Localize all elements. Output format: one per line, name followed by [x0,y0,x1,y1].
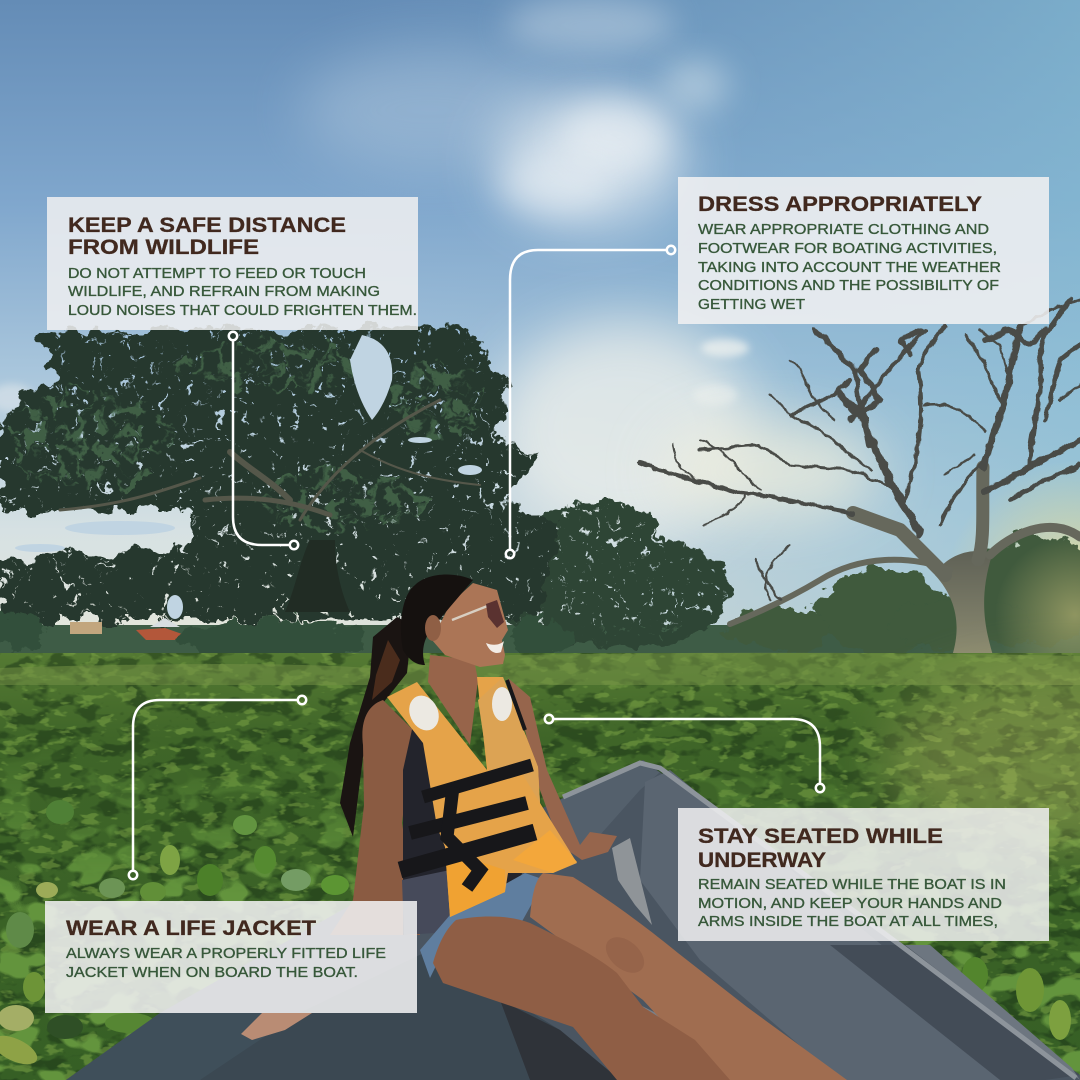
hair [401,575,473,665]
body text: LOUD NOISES THAT COULD FRIGHTEN THEM. [68,302,417,319]
trees: distant right [725,535,1080,652]
woman in life jacket [241,575,847,1080]
foreground leaves [0,800,1071,1070]
heading: DRESS APPROPRIATELY [698,192,982,216]
heading: FROM WILDLIFE [68,235,259,259]
connector: seated note [545,715,824,792]
connector: dress note [506,246,675,558]
panel: stay seated [678,808,1049,941]
vest badges [404,691,444,735]
far ground strip [0,625,1080,675]
connector: life jacket note [129,696,306,879]
panel: wear a life jacket [45,901,417,1013]
body text: REMAIN SEATED WHILE THE BOAT IS IN [698,876,1006,893]
sky gaps in the canopy [15,335,482,619]
vest straps [400,680,535,888]
body text: TAKING INTO ACCOUNT THE WEATHER [698,259,1001,276]
body text: CONDITIONS AND THE POSSIBILITY OF [698,277,999,294]
body text [68,265,417,319]
body text: JACKET WHEN ON BOARD THE BOAT. [66,964,358,981]
heading: STAY SEATED WHILE [698,824,943,848]
heading [68,213,346,259]
shrubs [0,612,572,664]
sunglasses [452,605,490,620]
body text: WEAR APPROPRIATE CLOTHING AND [698,221,989,238]
body text: FOOTWEAR FOR BOATING ACTIVITIES, [698,240,997,257]
body text: DO NOT ATTEMPT TO FEED OR TOUCH [68,265,366,282]
tree: large green canopy on left [0,328,560,620]
panel: keep a safe distance [47,197,418,330]
body text: ARMS INSIDE THE BOAT AT ALL TIMES, [698,913,998,930]
heading: KEEP A SAFE DISTANCE [68,213,346,237]
body text [698,221,1001,313]
trees: mid background [485,500,730,650]
panel: dress appropriately [678,177,1049,324]
connector: distance note [229,332,298,549]
ponytail [340,617,412,837]
body text: WILDLIFE, AND REFRAIN FROM MAKING [68,283,380,300]
water hyacinth field [0,653,1080,1080]
body text: GETTING WET [698,296,805,313]
heading [698,824,943,872]
tree: bare tree on right [640,300,1080,662]
vest [387,677,577,917]
body text: MOTION, AND KEEP YOUR HANDS AND [698,895,1002,912]
body text [698,876,1006,930]
shorts [420,873,545,978]
legs [530,873,847,1080]
dark top [403,725,540,935]
neck and face [428,655,478,745]
near arm [330,700,420,935]
heading: WEAR A LIFE JACKET [66,916,316,940]
heading: UNDERWAY [698,848,826,872]
hand on boat [241,1013,312,1040]
body text: ALWAYS WEAR A PROPERLY FITTED LIFE [66,945,386,962]
boat [66,760,1080,1080]
sky with clouds [0,0,1080,720]
body text [66,945,386,981]
houses at shore [70,618,182,640]
far arm [508,678,617,860]
